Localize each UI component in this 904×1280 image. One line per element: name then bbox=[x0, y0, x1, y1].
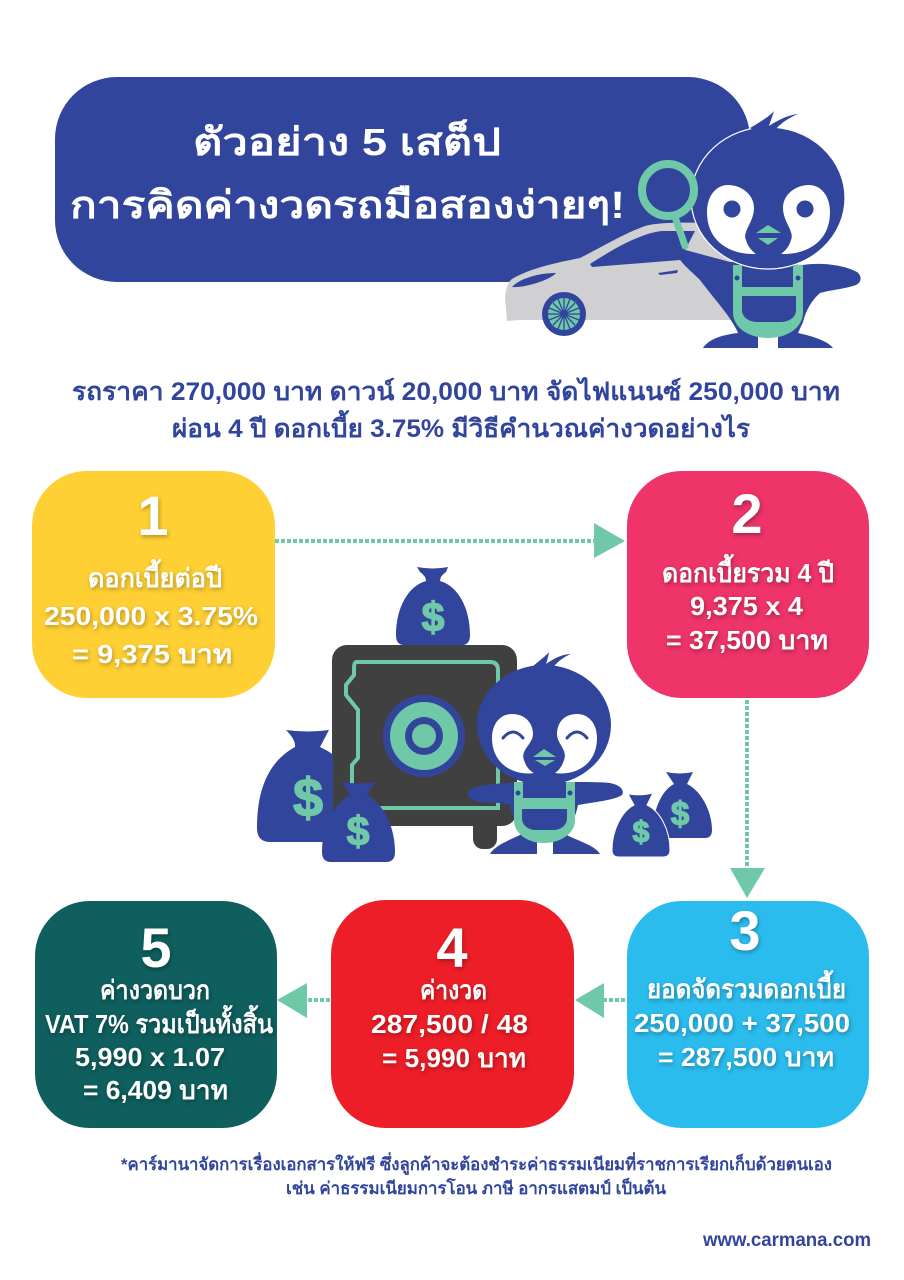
step 2 panel bbox=[627, 471, 869, 698]
step 1 panel: ดอกเบี้ยต่อปี bbox=[88, 558, 222, 593]
safe bbox=[332, 645, 517, 849]
step 1 panel: = 9,375 บาท bbox=[72, 639, 232, 669]
money bag front bbox=[322, 782, 395, 862]
overalls bbox=[733, 265, 803, 338]
penguin body bbox=[678, 248, 861, 348]
intro text bbox=[72, 376, 840, 443]
money bag left bbox=[257, 730, 333, 842]
website: www.carmana.com bbox=[702, 1230, 871, 1251]
title line 2: การคิดค่างวดรถมือสองง่ายๆ! bbox=[70, 185, 625, 227]
step 4 panel: ค่างวด bbox=[420, 975, 487, 1005]
step 5 panel bbox=[35, 901, 277, 1128]
money bag small right back bbox=[653, 772, 712, 838]
step 3 panel: 3 bbox=[729, 899, 761, 962]
illustration: happy penguin bbox=[468, 652, 623, 854]
money bag small right front bbox=[612, 793, 670, 857]
title line 1: ตัวอย่าง 5 เสต็ป bbox=[193, 119, 501, 164]
penguin hair bbox=[532, 652, 571, 669]
magnifier bbox=[642, 164, 694, 216]
penguin beak bbox=[533, 749, 556, 757]
illustration: safe and money bags bbox=[257, 567, 712, 862]
footnote: *คาร์มานาจัดการเรื่องเอกสารให้ฟรี ซึ่งลูกค้าจะต้องชำระค่าธรรมเนียมที่ราชการเรียกเก็บด้วยตนเอง bbox=[121, 1152, 832, 1176]
step 2 panel: 2 bbox=[731, 482, 763, 545]
arrow 4 to 5 bbox=[277, 983, 330, 1018]
step 5 panel: 5 bbox=[140, 916, 172, 979]
arrow 2 to 3 bbox=[730, 700, 765, 898]
money bag small right front: $ bbox=[633, 816, 650, 849]
intro text: ผ่อน 4 ปี ดอกเบี้ย 3.75% มีวิธีคำนวณค่างวดอย่างไร bbox=[172, 409, 751, 443]
step 5 panel: 5,990 x 1.07 bbox=[75, 1042, 225, 1072]
arrow 3 to 4 bbox=[575, 983, 625, 1018]
penguin head bbox=[477, 665, 611, 785]
step 4 panel: 4 bbox=[436, 916, 468, 979]
illustration: penguin with magnifier bbox=[642, 111, 861, 348]
step 2 panel: = 37,500 บาท bbox=[666, 625, 828, 655]
step 5 panel: ค่างวดบวก bbox=[100, 975, 210, 1005]
money bag top bbox=[396, 567, 470, 645]
step 4 panel: = 5,990 บาท bbox=[382, 1043, 526, 1073]
penguin eyes bbox=[492, 714, 534, 773]
illustration: car bbox=[505, 223, 735, 336]
step 3 panel: 250,000 + 37,500 bbox=[634, 1008, 850, 1038]
penguin eyes bbox=[707, 185, 756, 254]
title banner bbox=[55, 77, 750, 282]
arrow 1 to 2 bbox=[275, 523, 625, 558]
intro text: รถราคา 270,000 บาท ดาวน์ 20,000 บาท จัดไฟแนนซ์ 250,000 บาท bbox=[72, 376, 840, 406]
penguin hair bbox=[750, 111, 798, 131]
money bag left: $ bbox=[293, 768, 323, 828]
money bag small right back: $ bbox=[671, 795, 689, 832]
step 3 panel: = 287,500 บาท bbox=[658, 1042, 834, 1072]
step 4 panel bbox=[331, 900, 574, 1128]
penguin head bbox=[691, 127, 845, 269]
smile eyes bbox=[503, 732, 587, 738]
penguin body bbox=[468, 782, 623, 854]
money bag top: $ bbox=[422, 594, 445, 640]
penguin beak bbox=[756, 225, 781, 233]
money bag front: $ bbox=[347, 808, 370, 854]
step 2 panel: 9,375 x 4 bbox=[690, 591, 804, 621]
step 1 panel bbox=[32, 471, 275, 698]
footnote bbox=[121, 1152, 832, 1198]
step 5 panel: VAT 7% รวมเป็นทั้งสิ้น bbox=[45, 1004, 273, 1039]
step 1 panel: 250,000 x 3.75% bbox=[44, 601, 258, 631]
step 5 panel: = 6,409 บาท bbox=[83, 1075, 228, 1105]
footnote: เช่น ค่าธรรมเนียมการโอน ภาษี อากรแสตมป์ เป็นต้น bbox=[286, 1176, 666, 1198]
car wheel bbox=[542, 292, 586, 336]
step 4 panel: 287,500 / 48 bbox=[371, 1009, 528, 1039]
step 3 panel: ยอดจัดรวมดอกเบี้ย bbox=[647, 969, 846, 1004]
overalls bbox=[514, 782, 575, 843]
step 2 panel: ดอกเบี้ยรวม 4 ปี bbox=[662, 553, 834, 588]
step 1 panel: 1 bbox=[137, 484, 169, 547]
step 3 panel bbox=[627, 899, 869, 1128]
